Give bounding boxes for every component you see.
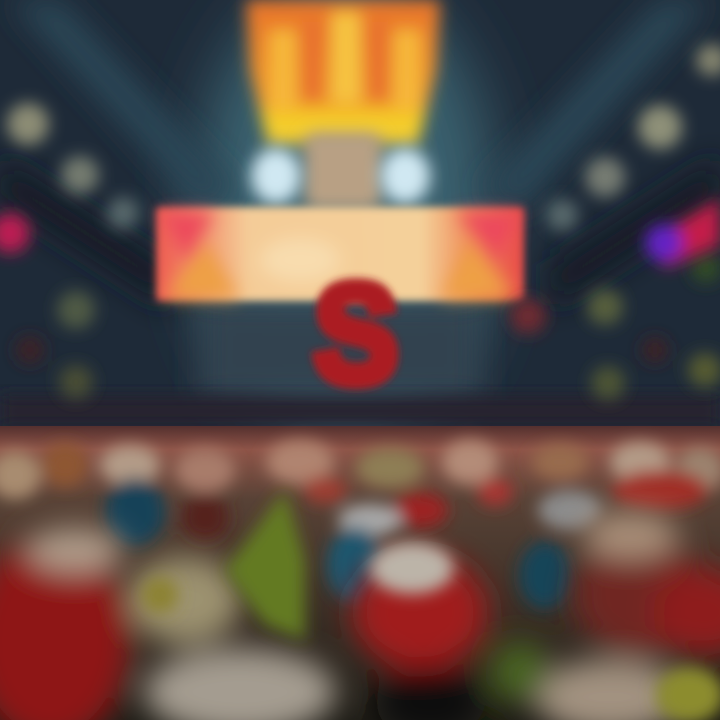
- figure face: [304, 132, 382, 210]
- background: dark arena wall: [0, 0, 720, 440]
- right string of lights: [546, 44, 720, 400]
- letter S emblem: S: [314, 256, 398, 412]
- small red spark: [510, 298, 546, 334]
- icon: crown: [246, 0, 440, 145]
- stage light: left: [251, 148, 301, 204]
- left string of lights: [0, 103, 139, 399]
- crowd of blurred balls: [0, 426, 720, 720]
- right neon streak: [645, 198, 720, 268]
- stage light: right: [380, 148, 430, 204]
- banner: [156, 207, 524, 301]
